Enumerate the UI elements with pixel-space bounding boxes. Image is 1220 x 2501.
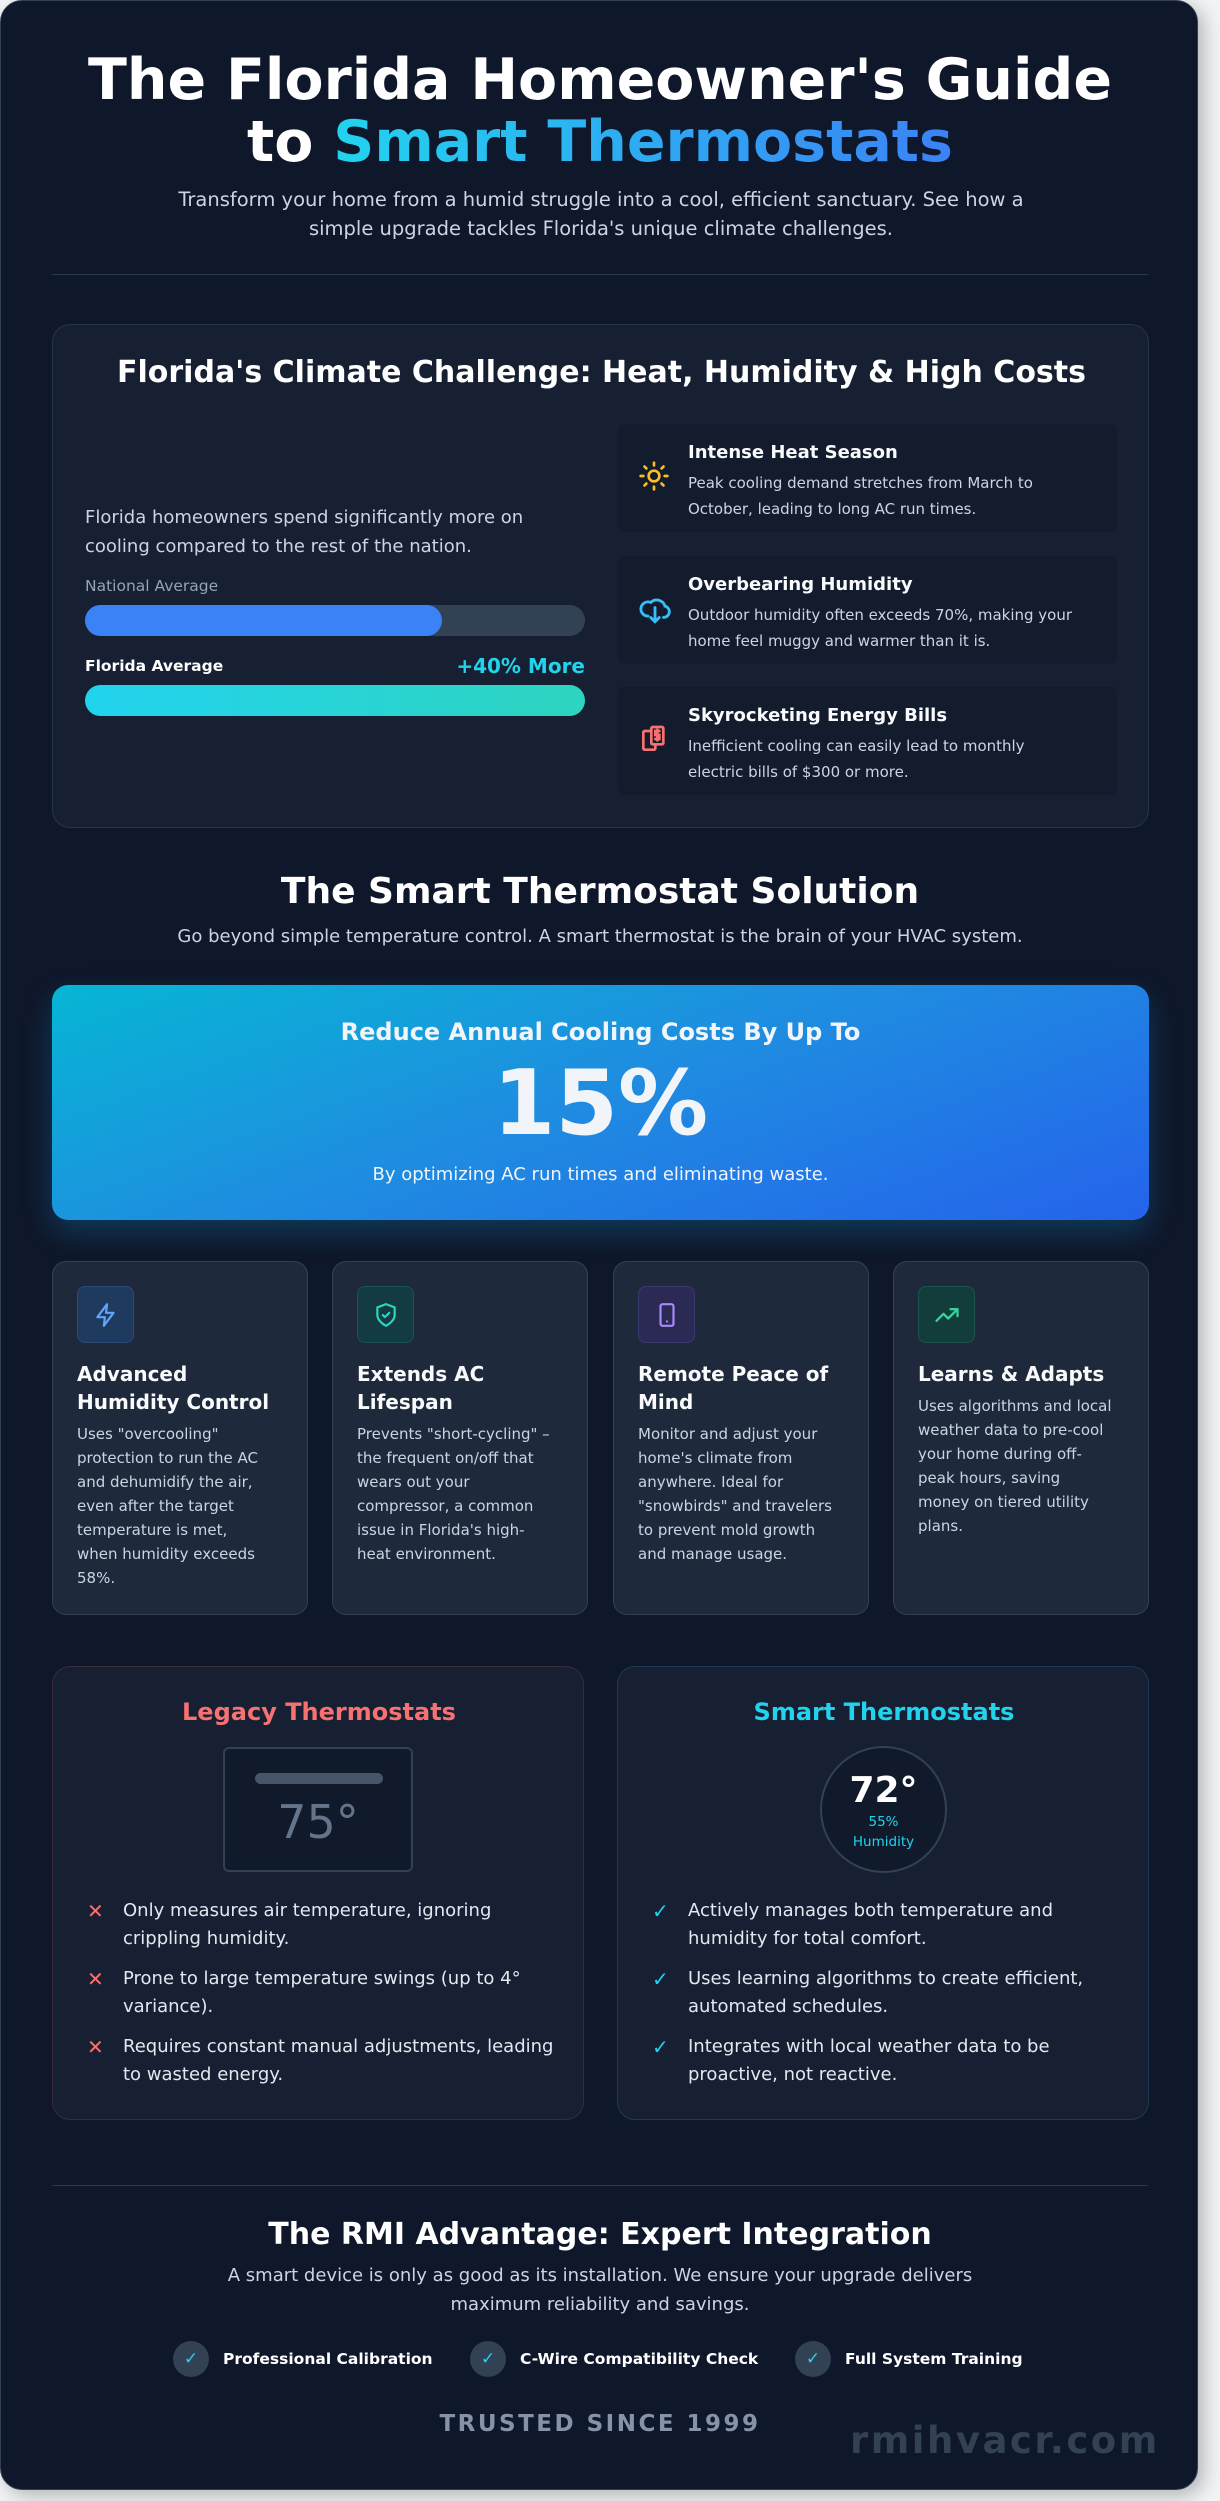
panel: climate challenge [52,324,1149,828]
feature card: humidity control: Uses "overcooling" protection to run the AC and dehumidify the air, even after the target temperature is met, when humidity exceeds 58%. [77,1425,258,1587]
icon: smart thermostat: Humidity [853,1834,914,1850]
feature card: humidity control: Advanced Humidity Control [77,1362,269,1414]
title [88,47,1112,175]
icon: smart thermostat: 55% [868,1814,898,1830]
callout: 15% savings: By optimizing AC run times and eliminating waste. [372,1164,828,1185]
solution heading: The Smart Thermostat Solution [281,871,919,912]
icon: sun [639,461,669,491]
info card: bills: Skyrocketing Energy Bills [688,705,947,726]
list: legacy drawbacks: ✕ [87,2035,104,2059]
title: to Smart Thermostats [247,109,953,175]
list: legacy drawbacks: ✕ [87,1899,104,1923]
solution subtitle: Go beyond simple temperature control. A smart thermostat is the brain of your HVAC system. [177,926,1023,947]
feature card: learns: Learns & Adapts [918,1362,1104,1386]
panel: legacy thermostats [52,1666,584,2120]
bar chart: comparison: Florida Average [85,657,223,675]
info card: humidity: Overbearing Humidity [688,574,913,595]
info card: heat [618,424,1117,532]
badge: c-wire: ✓ [481,2349,495,2369]
badge: calibration: ✓ [184,2349,198,2369]
list: legacy drawbacks [87,1899,553,2085]
RMI text: A smart device is only as good as its installation. We ensure your upgrade delivers maximum reliability and savings. [228,2265,972,2315]
feature card: lifespan: Prevents "short-cycling" – the frequent on/off that wears out your compressor, a common issue in Florida's high-heat environment. [357,1425,550,1563]
title: The Florida Homeowner's Guide [88,47,1112,113]
list: smart benefits: ✓ [652,2035,669,2059]
bar chart: comparison [85,577,585,716]
list: legacy drawbacks: ✕ [87,1967,104,1991]
intro text: Florida homeowners spend significantly more on cooling compared to the rest of the nation. [85,507,523,557]
icon: legacy thermostat: 75° [277,1795,359,1849]
badge: training: Full System Training [845,2350,1023,2368]
list: legacy drawbacks: Requires constant manual adjustments, leading to wasted energy. [123,2036,553,2085]
RMI heading: The RMI Advantage: Expert Integration [268,2217,932,2252]
feature card: remote: Monitor and adjust your home's climate from anywhere. Ideal for "snowbirds" and travelers to prevent mold growth and manage usage. [638,1425,832,1563]
callout: 15% savings: 15% [493,1051,708,1156]
info card: heat: Peak cooling demand stretches from March to October, leading to long AC run times. [688,474,1033,518]
badge: calibration [173,2341,433,2377]
list: smart benefits [652,1899,1083,2085]
trusted since: TRUSTED SINCE 1999 [439,2411,761,2437]
list: smart benefits: ✓ [652,1967,669,1991]
callout: 15% savings [52,985,1149,1220]
list: legacy drawbacks: Prone to large temperature swings (up to 4° variance). [123,1968,521,2017]
watermark: rmihvacr.com [850,2419,1160,2462]
icon: cloud drop [640,598,671,624]
badge: training: ✓ [806,2349,820,2369]
list: smart benefits: ✓ [652,1899,669,1923]
subtitle: Transform your home from a humid struggle into a cool, efficient sanctuary. See how a simple upgrade tackles Florida's unique climate challenges. [178,188,1024,240]
feature card: learns: Uses algorithms and local weather data to pre-cool your home during off-peak hours, saving money on tiered utility plans. [918,1397,1112,1535]
bar chart: comparison: +40% More [456,654,585,678]
feature card: humidity control [52,1261,308,1615]
smart heading: Smart Thermostats [754,1698,1014,1726]
panel heading: Florida's Climate Challenge: Heat, Humidity & High Costs [117,355,1086,390]
icon: phone [638,1286,695,1343]
list: smart benefits: Actively manages both temperature and humidity for total comfort. [688,1900,1053,1949]
badge: training [795,2341,1023,2377]
legacy heading: Legacy Thermostats [182,1698,456,1726]
feature card: lifespan [332,1261,588,1615]
feature card: remote: Remote Peace of Mind [638,1362,828,1414]
info card: humidity [618,556,1117,664]
callout: 15% savings: Reduce Annual Cooling Costs By Up To [341,1018,860,1046]
icon: smart thermostat: 72° [849,1770,918,1811]
info card: humidity: Outdoor humidity often exceeds 70%, making your home feel muggy and warmer than it is. [688,606,1072,650]
info card: heat: Intense Heat Season [688,442,898,463]
icon: smart thermostat [820,1746,947,1873]
list: smart benefits: Uses learning algorithms to create efficient, automated schedules. [688,1968,1083,2017]
feature card: lifespan: Extends AC Lifespan [357,1362,484,1414]
info card: bills: Inefficient cooling can easily lead to monthly electric bills of $300 or more. [688,737,1025,781]
icon: bill [642,726,665,751]
badge: c-wire [470,2341,758,2377]
feature card: remote [613,1261,869,1615]
icon: trend [918,1286,975,1343]
info card: bills [618,687,1117,795]
list: smart benefits: Integrates with local weather data to be proactive, not reactive. [688,2036,1050,2085]
icon: legacy thermostat [223,1747,413,1872]
panel: smart thermostats [617,1666,1149,2120]
feature card: learns [893,1261,1149,1615]
badge: c-wire: C-Wire Compatibility Check [520,2350,758,2368]
list: legacy drawbacks: Only measures air temperature, ignoring crippling humidity. [123,1900,491,1949]
bar chart: comparison: National Average [85,577,218,595]
badge: calibration: Professional Calibration [223,2350,433,2368]
icon: shield [357,1286,414,1343]
icon: bolt [77,1286,134,1343]
